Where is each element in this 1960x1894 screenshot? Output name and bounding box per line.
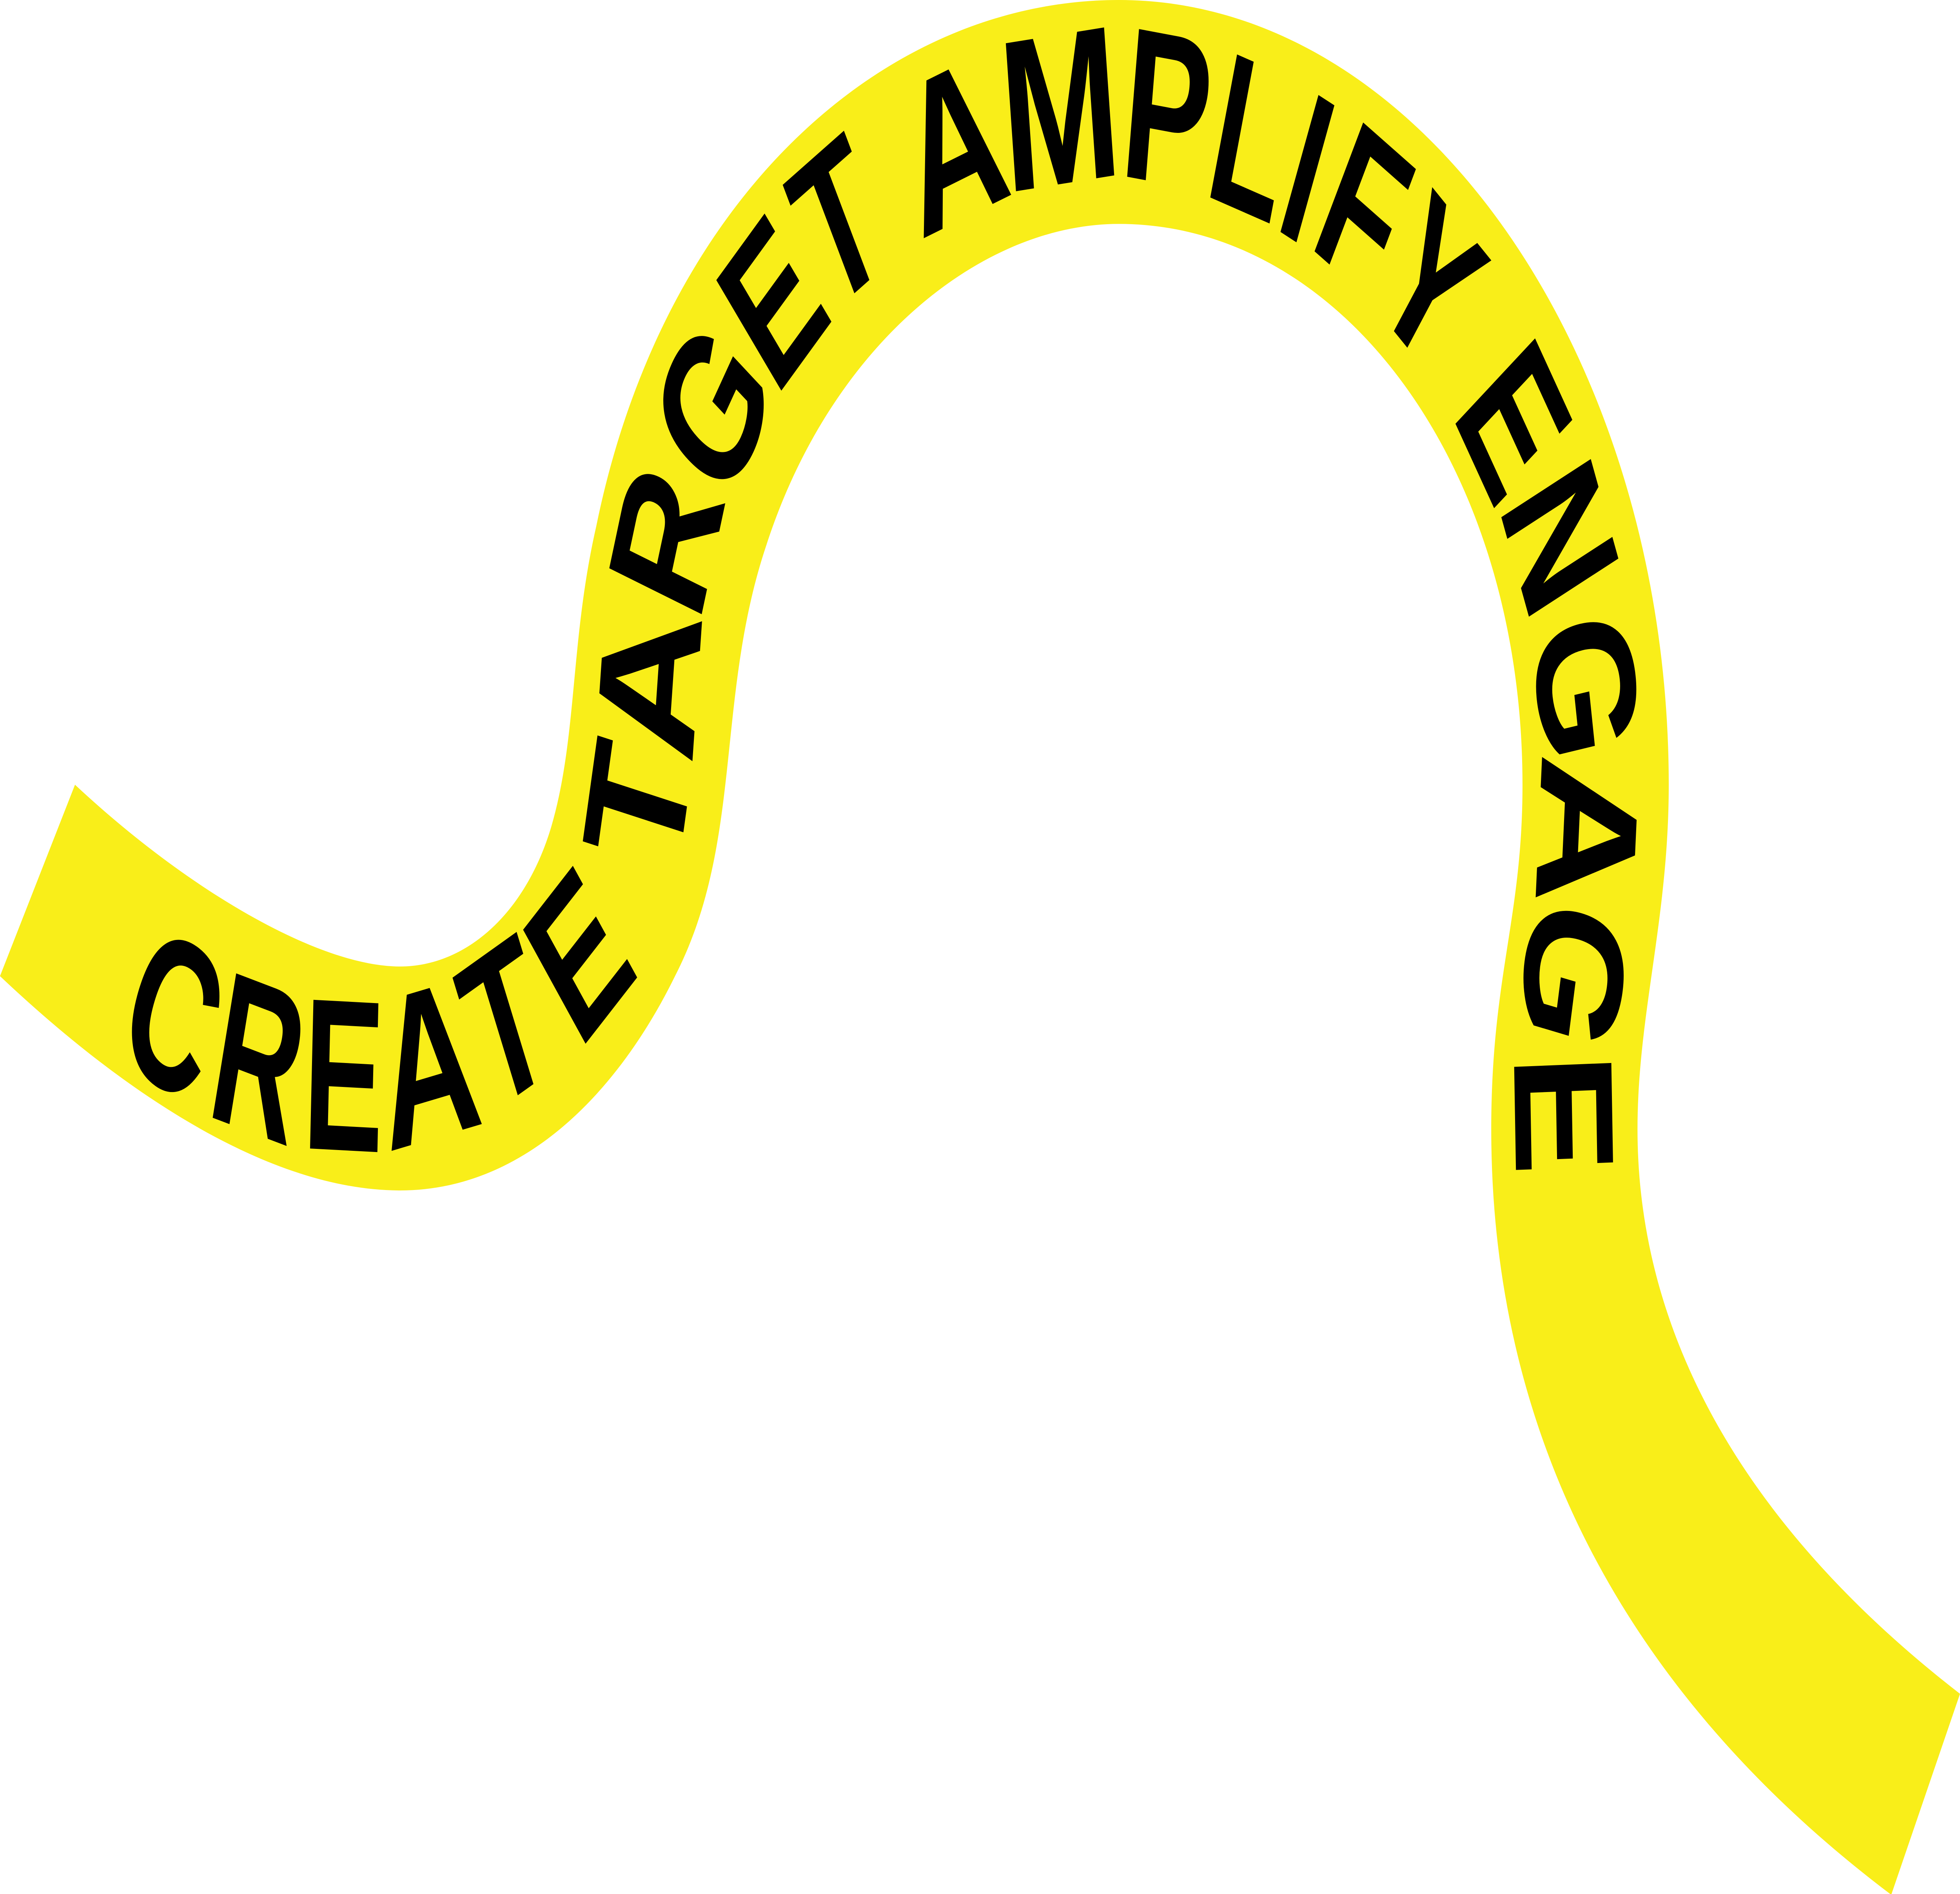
word: CREATE: C — [101, 876, 247, 1152]
word: CREATE: T — [438, 888, 572, 1155]
word: ENGAGE: E — [1484, 1049, 1644, 1178]
word: ENGAGE: G — [1501, 597, 1671, 776]
word: ENGAGE: A — [1505, 749, 1670, 916]
word: TARGET: T — [766, 89, 909, 355]
word: TARGET: R — [578, 439, 755, 640]
word: AMPLIFY: A — [881, 7, 1024, 283]
word: ENGAGE: E — [1426, 301, 1601, 541]
word: CREATE: E — [497, 823, 660, 1087]
word: ENGAGE: N — [1470, 429, 1650, 646]
word: ENGAGE: G — [1488, 883, 1661, 1069]
word: ENGAGE — [1426, 301, 1671, 1178]
word: CREATE: E — [301, 952, 387, 1198]
word: AMPLIFY: Y — [1350, 149, 1512, 414]
word: TARGET: E — [690, 171, 855, 433]
word: CREATE — [101, 823, 660, 1198]
word: TARGET: T — [552, 724, 722, 884]
word: AMPLIFY: L — [1194, 6, 1308, 270]
word: AMPLIFY: I — [1261, 47, 1354, 289]
word: TARGET — [552, 89, 909, 884]
word: CREATE: R — [198, 925, 320, 1192]
word: AMPLIFY: F — [1292, 76, 1435, 341]
word: TARGET: G — [621, 279, 804, 535]
word: TARGET: A — [565, 595, 732, 771]
word: CREATE: A — [364, 931, 491, 1197]
word: AMPLIFY — [881, 0, 1512, 414]
